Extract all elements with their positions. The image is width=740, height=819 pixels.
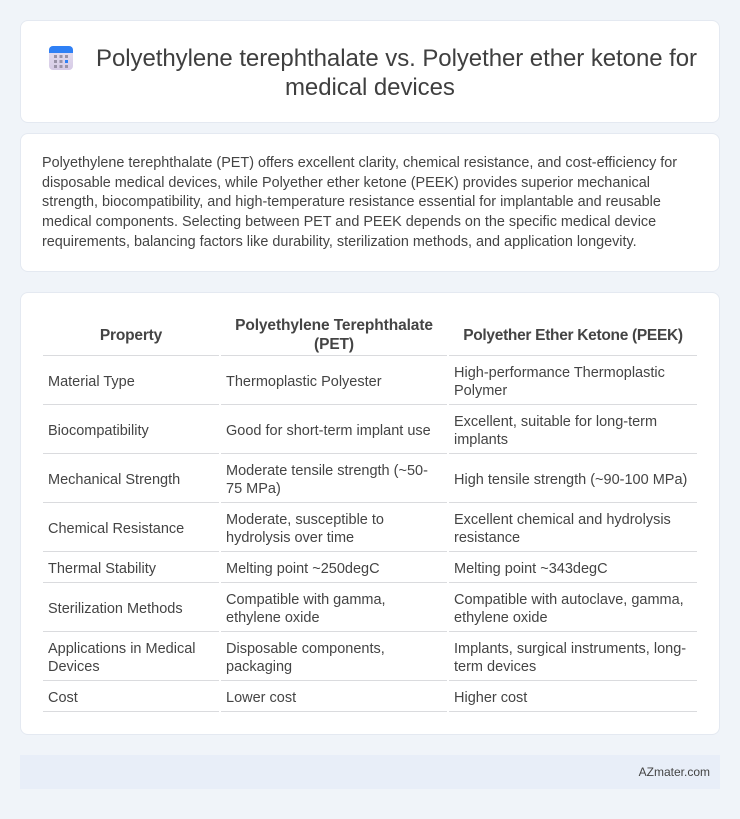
summary text [42, 155, 677, 250]
title [96, 45, 697, 101]
text: High tensile strength (~90-100 MPa) [454, 472, 687, 488]
text: Moderate tensile strength (~50- [226, 463, 428, 479]
text: Good for short-term implant use [226, 423, 431, 439]
text: Melting point ~343degC [454, 561, 608, 577]
panel: summary [20, 133, 720, 272]
text: Disposable components, [226, 641, 385, 657]
text: Excellent chemical and hydrolysis [454, 512, 671, 528]
title: Polyethylene terephthalate vs. Polyether ether ketone for [96, 45, 697, 72]
text: implants [454, 432, 508, 448]
text: ethylene oxide [454, 610, 548, 626]
text: Implants, surgical instruments, long- [454, 641, 686, 657]
text: Compatible with gamma, [226, 592, 386, 608]
text: ethylene oxide [226, 610, 320, 626]
text: Lower cost [226, 690, 296, 706]
table header: PET: (PET) [314, 336, 354, 353]
row: mechanical strength: Mechanical Strength [48, 472, 180, 488]
text: Thermoplastic Polyester [226, 374, 382, 390]
text: Polymer [454, 383, 507, 399]
summary text: strength, biocompatibility, and high-temperature resistance essential for implantable and reusable [42, 194, 661, 210]
table header: property: Property [100, 327, 162, 344]
summary text: medical components. Selecting between PET and PEEK depends on the specific medical device [42, 214, 656, 230]
text: Compatible with autoclave, gamma, [454, 592, 684, 608]
icon: calendar grid [49, 46, 73, 70]
table header: PET [235, 317, 433, 353]
panel: comparison table [20, 292, 720, 735]
text: resistance [454, 530, 520, 546]
summary text: disposable medical devices, while Polyether ether ketone (PEEK) provides superior mechanical [42, 175, 650, 191]
row: applications [48, 641, 196, 675]
row: biocompatibility: Biocompatibility [48, 423, 149, 439]
text: hydrolysis over time [226, 530, 354, 546]
text: High-performance Thermoplastic [454, 365, 665, 381]
text: Moderate, susceptible to [226, 512, 384, 528]
table header: PET: Polyethylene Terephthalate [235, 317, 433, 334]
row: chemical resistance: Chemical Resistance [48, 521, 184, 537]
row: cost: Cost [48, 690, 78, 706]
summary text: requirements, balancing factors like durability, sterilization methods, and application longevity. [42, 234, 637, 250]
text: 75 MPa) [226, 481, 281, 497]
text: Melting point ~250degC [226, 561, 380, 577]
footer text: AZmater.com [639, 765, 710, 779]
text: packaging [226, 659, 292, 675]
summary text: Polyethylene terephthalate (PET) offers excellent clarity, chemical resistance, and cost-efficiency for [42, 155, 677, 171]
header card [20, 20, 720, 123]
row: applications: Applications in Medical [48, 641, 196, 657]
text: Higher cost [454, 690, 527, 706]
table header: PEEK: Polyether Ether Ketone (PEEK) [463, 327, 683, 344]
row: thermal stability: Thermal Stability [48, 561, 156, 577]
row: applications: Devices [48, 659, 100, 675]
row: material type: Material Type [48, 374, 135, 390]
text: term devices [454, 659, 536, 675]
footer bar [20, 755, 720, 789]
text: Excellent, suitable for long-term [454, 414, 657, 430]
row: sterilization methods: Sterilization Methods [48, 601, 183, 617]
title: medical devices [285, 74, 455, 101]
